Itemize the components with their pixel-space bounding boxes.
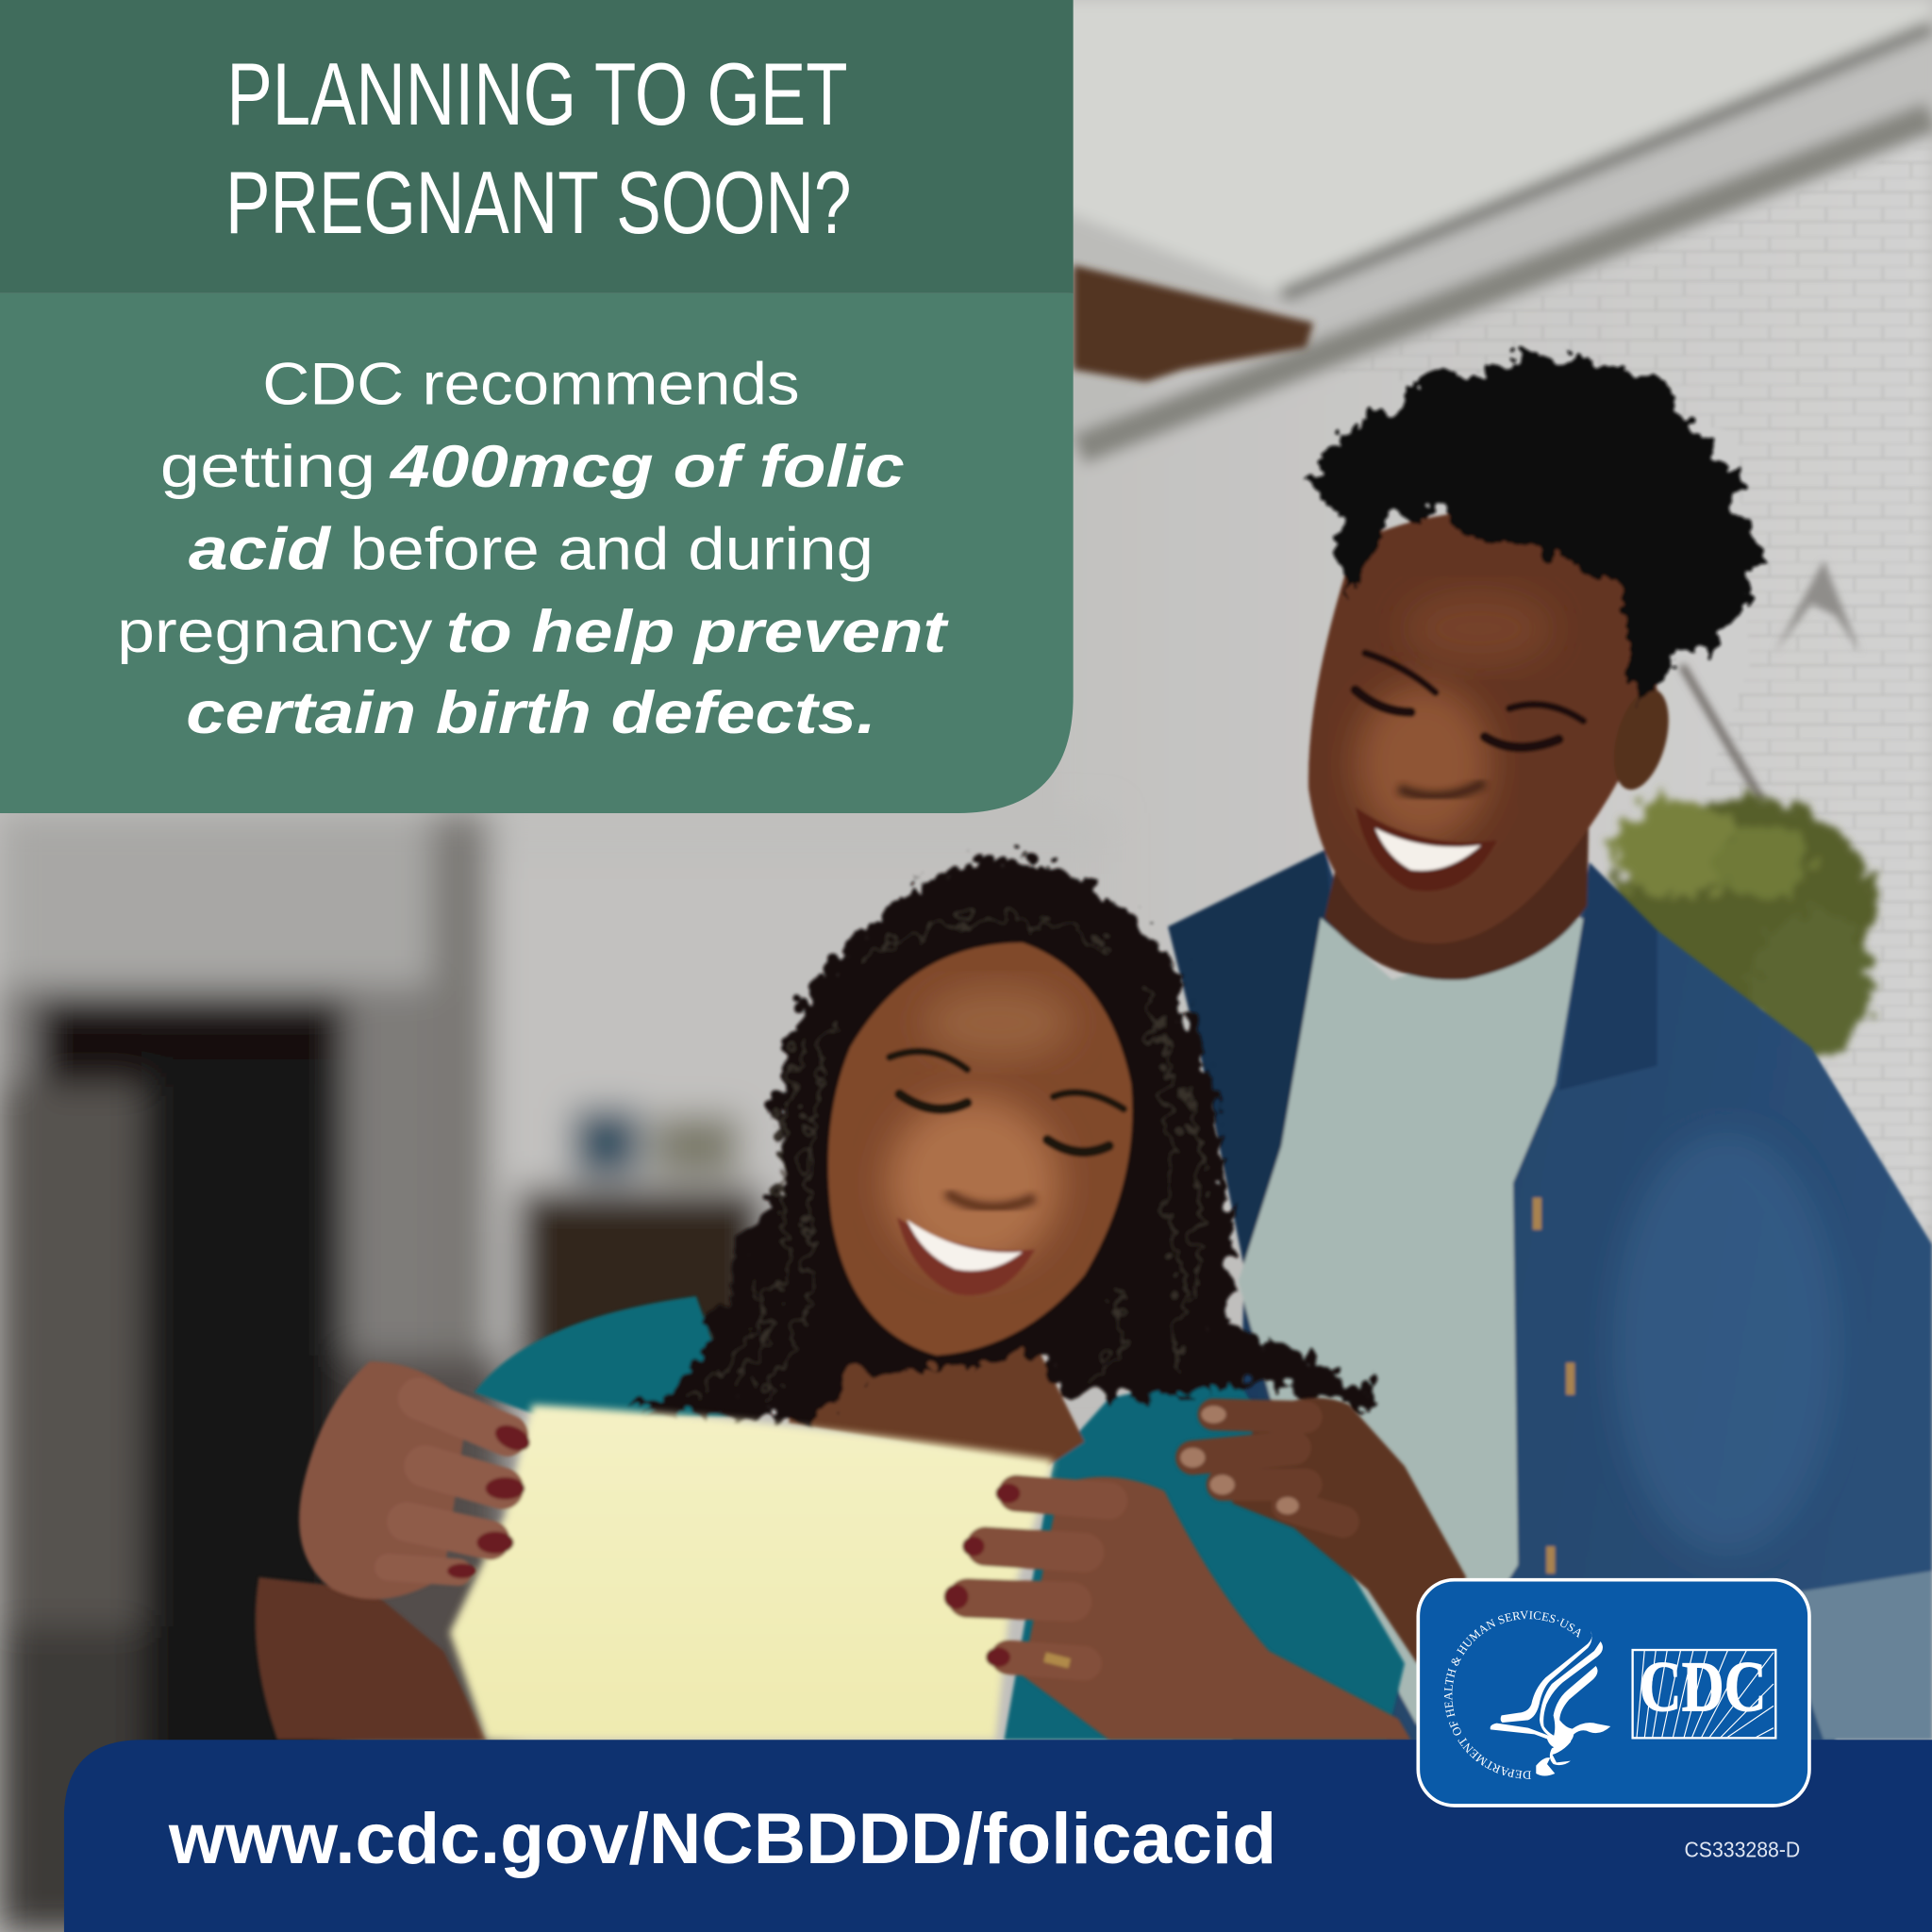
message text: pregnancy xyxy=(117,599,433,665)
message text: 400mcg of folic xyxy=(389,434,905,500)
CDC logo: CDC xyxy=(1640,1646,1767,1726)
man: hair xyxy=(1318,352,1757,712)
woman: chest xyxy=(789,1343,1084,1466)
woman: smile xyxy=(897,1217,1035,1295)
nails xyxy=(447,1420,1020,1667)
man: smile xyxy=(1356,808,1497,891)
man: jacket stitching xyxy=(1533,1198,1574,1574)
hanging plant xyxy=(1614,560,1873,1059)
woman: teal shirt xyxy=(475,1296,740,1417)
woman: left arm xyxy=(256,1577,487,1740)
man: jacket sleeve highlight xyxy=(1614,1134,1836,1553)
woman xyxy=(256,846,1405,1740)
lower room xyxy=(0,813,1109,1932)
woman: brows and eyes xyxy=(890,1052,1124,1152)
website url: www.cdc.gov/NCBDDD/folicacid xyxy=(168,1799,1276,1879)
heading panel xyxy=(0,0,1074,293)
footer band xyxy=(64,1740,1932,1932)
man: ear xyxy=(1604,683,1678,795)
man: denim jacket xyxy=(1168,850,1932,1750)
message text: getting xyxy=(160,434,375,500)
ceiling beam xyxy=(1074,265,1313,382)
cream baby garment and hands xyxy=(299,1361,1411,1740)
man: nose shadow xyxy=(1398,782,1485,796)
man xyxy=(1168,352,1932,1750)
message text: before and during xyxy=(350,516,874,582)
message text: to help prevent xyxy=(446,599,950,665)
man: face xyxy=(1308,511,1657,943)
woman: hair xyxy=(628,846,1370,1413)
HHS seal: DEPARTMENT OF HEALTH & HUMAN SERVICES·USA xyxy=(1443,1611,1581,1779)
man: t-shirt xyxy=(1239,918,1583,1725)
message text: certain birth defects. xyxy=(186,680,876,746)
man: neck xyxy=(1324,789,1590,980)
woman: left hand xyxy=(299,1361,508,1599)
logo sunburst xyxy=(1637,1650,1774,1738)
woman: face xyxy=(828,942,1132,1356)
message text: CDC recommends xyxy=(262,351,800,417)
man: right lapel xyxy=(1558,862,1657,1091)
woman: right hand and forearm xyxy=(967,1476,1411,1740)
garment xyxy=(450,1405,1054,1740)
man's hand on shoulder xyxy=(1180,1398,1466,1663)
man: sleeve cuff xyxy=(1774,1571,1932,1740)
message panel xyxy=(0,293,1074,813)
message text xyxy=(117,351,950,746)
man: left lapel xyxy=(1168,850,1337,1269)
message text: acid xyxy=(189,516,332,582)
heading text: PLANNING TO GET xyxy=(226,44,848,143)
heading text xyxy=(225,44,852,252)
heading text: PREGNANT SOON? xyxy=(225,153,852,252)
HHS eagle xyxy=(1491,1631,1610,1776)
logo badge xyxy=(1416,1577,1811,1807)
brick wall texture xyxy=(1324,142,1932,1232)
woman: nose shadow xyxy=(946,1192,1035,1208)
man: brows and eyes xyxy=(1356,653,1583,747)
document code: CS333288-D xyxy=(1684,1837,1800,1861)
